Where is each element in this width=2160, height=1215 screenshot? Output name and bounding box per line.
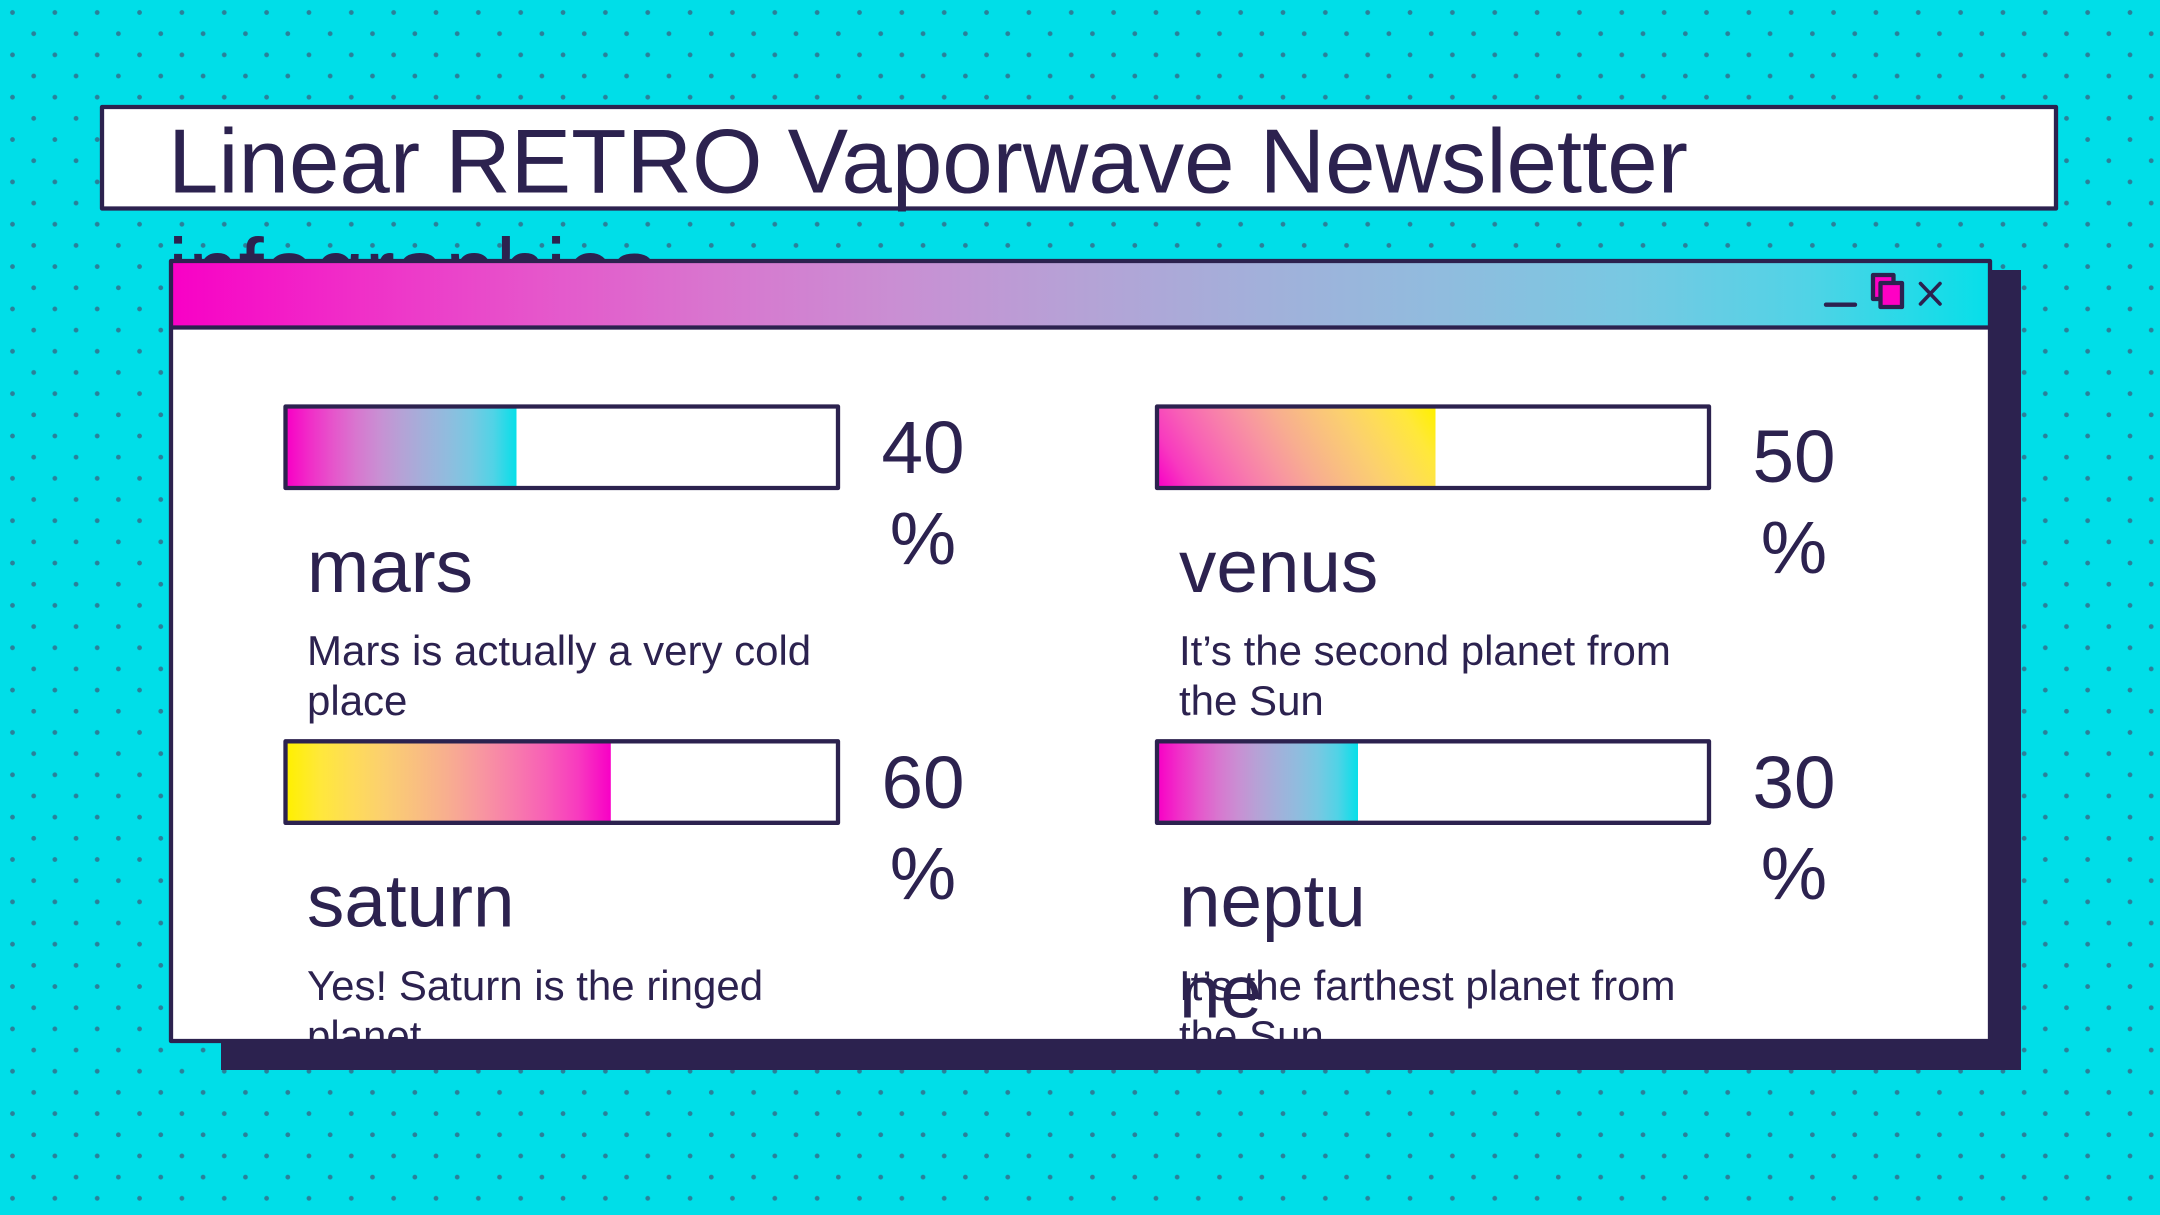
description: mars: Mars is actually a very cold	[307, 627, 811, 674]
name: neptune	[1184, 878, 1361, 1018]
name: venus: venus	[1179, 524, 1378, 608]
progress item: saturn	[286, 740, 965, 1059]
progress item: neptune	[1157, 740, 1836, 1059]
bar: mars 40%	[286, 406, 838, 488]
value: 40%: 40	[881, 405, 965, 489]
progress item: neptune: the Sun	[1179, 1012, 1324, 1059]
progress item: mars: %	[890, 496, 956, 580]
panel contents	[286, 405, 1836, 1059]
title: infographics	[168, 221, 657, 322]
name: neptune: ne	[1179, 950, 1262, 1034]
window title bar	[171, 261, 1990, 328]
progress item: saturn: %	[890, 831, 956, 915]
icon: minimize	[1826, 303, 1855, 307]
icon: restore windows	[1873, 275, 1902, 307]
bar: saturn 60%	[286, 741, 838, 823]
name: mars: mars	[307, 524, 473, 608]
progress item: mars: place	[307, 677, 407, 724]
progress item: venus: %	[1761, 505, 1827, 589]
bar: venus 50%	[1157, 406, 1709, 488]
icon: close	[1920, 284, 1940, 304]
title: Linear RETRO Vaporwave Newsletter	[168, 112, 1688, 212]
value: 30%: 30	[1752, 740, 1836, 824]
progress item: neptune: %	[1761, 831, 1827, 915]
window shadow	[221, 270, 2021, 1070]
description: neptune: It’s the farthest planet from	[1179, 962, 1675, 1009]
progress item: mars	[286, 405, 965, 724]
panel: window	[171, 261, 1990, 1059]
description: saturn: Yes! Saturn is the ringed	[307, 962, 763, 1009]
value: 50%: 50	[1752, 414, 1836, 498]
progress item: venus	[1157, 406, 1836, 724]
name: neptune: neptu	[1179, 858, 1366, 942]
progress item: venus: the Sun	[1179, 677, 1324, 724]
title	[102, 107, 2056, 322]
name: saturn: saturn	[307, 858, 514, 942]
description: venus: It’s the second planet from	[1179, 627, 1671, 674]
progress item: saturn: planet	[307, 1012, 422, 1059]
value: 60%: 60	[881, 740, 965, 824]
bar: neptune 30%	[1157, 741, 1709, 823]
